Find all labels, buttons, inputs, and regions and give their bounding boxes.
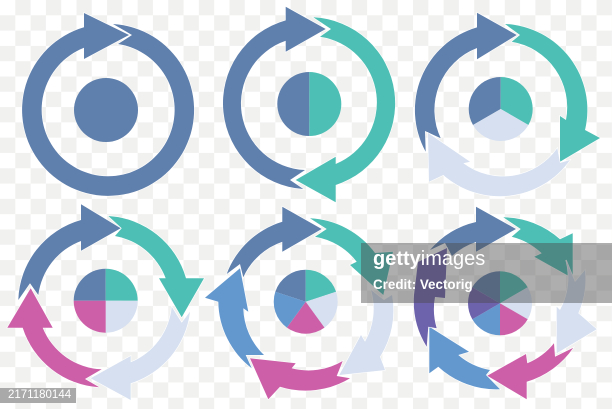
diagram 1: single arrow cycle (22, 13, 194, 196)
diagram 2: two arrow cycle (223, 7, 395, 202)
arrow: light blue (557, 260, 597, 353)
pie: five segments (274, 270, 338, 334)
diagram 3: three arrow cycle (415, 13, 600, 196)
arrow: blue (415, 13, 517, 152)
pie: six segments (468, 271, 532, 335)
watermark credit text: Credit: Vectorig (373, 277, 473, 292)
arrow: light blue (339, 290, 393, 375)
diagram 6: six arrow cycle (414, 207, 597, 399)
arrow: blue (430, 207, 516, 256)
image id label: 2171180144 (8, 389, 71, 401)
arrow: light blue (428, 133, 570, 196)
arrow: teal (310, 218, 393, 295)
arrow: purple (414, 248, 447, 347)
diagram 5: five arrow cycle (205, 207, 393, 399)
arrow: pink (7, 288, 102, 387)
arrow: blue (223, 7, 326, 189)
arrow: blue (227, 207, 322, 277)
image id label (0, 388, 76, 403)
arrow: light blue (91, 307, 190, 400)
arrow: teal (296, 17, 395, 202)
arrow: teal (108, 216, 204, 317)
arrow: pink (487, 343, 573, 399)
diagram 4: four arrow cycle (7, 204, 204, 400)
arrow: mid blue (429, 327, 500, 389)
watermark logo text: gettyimages (373, 248, 485, 270)
arrow: blue ring (22, 13, 194, 196)
pie: full disc (74, 78, 138, 142)
pie: two segments (277, 72, 341, 136)
arrow: mid blue (205, 268, 264, 368)
pie: four segments (74, 269, 138, 333)
arrow: blue (18, 204, 121, 300)
arrow: pink (250, 358, 350, 399)
arrow: teal (505, 24, 600, 162)
watermark band (361, 243, 612, 303)
arrow: teal (503, 217, 573, 278)
pie: three segments (469, 77, 533, 141)
